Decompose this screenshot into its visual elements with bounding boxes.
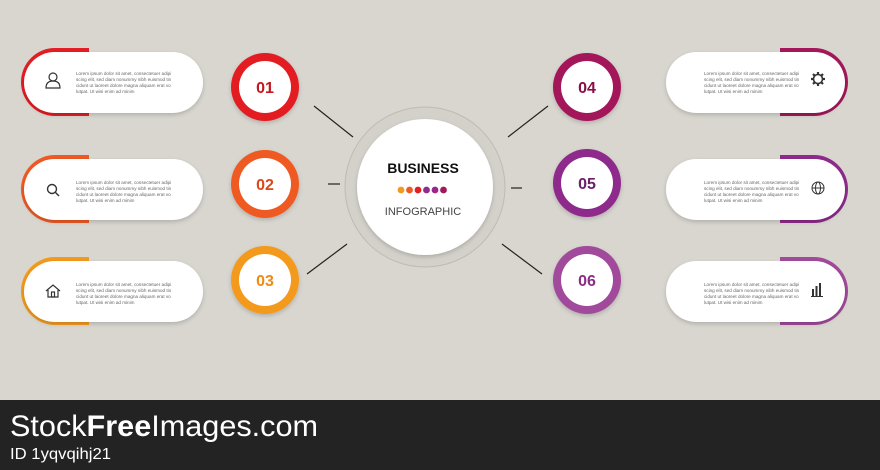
left card 1	[21, 48, 203, 116]
left card 2: lutpat. Ut wisi enim ad minim	[76, 198, 135, 203]
left card 2	[21, 155, 203, 223]
number circle 04	[553, 53, 621, 121]
right card 5	[666, 155, 848, 223]
right card 5: lutpat. Ut wisi enim ad minim	[704, 198, 763, 203]
left card 2: Lorem ipsum dolor sit amet, consectetuer adipi	[76, 180, 171, 185]
left card 3: cidunt ut laoreet dolore magna aliquam erat vo	[76, 294, 171, 299]
icon: globe	[812, 182, 824, 194]
right card 6: Lorem ipsum dolor sit amet, consectetuer adipi	[704, 282, 799, 287]
right card 6: lutpat. Ut wisi enim ad minim	[704, 300, 763, 305]
icon: bar chart	[811, 283, 823, 297]
icon: search	[48, 184, 59, 196]
number circle 03	[231, 246, 299, 314]
number circle 02	[231, 150, 299, 218]
right card 4: Lorem ipsum dolor sit amet, consectetuer adipi	[704, 71, 799, 76]
footer band: ID 1yqvqihj21	[10, 446, 111, 463]
center circle	[345, 107, 505, 267]
subtitle: INFOGRAPHIC	[385, 206, 461, 218]
number circle 06: 06	[578, 273, 596, 290]
icon: gear	[811, 72, 825, 86]
right card 4: cidunt ut laoreet dolore magna aliquam erat vo	[704, 83, 799, 88]
number circle 02: 02	[256, 177, 274, 194]
left card 2: cidunt ut laoreet dolore magna aliquam erat vo	[76, 192, 171, 197]
right card 6: scing elit, sed diam nonummy nibh euismod tin	[704, 288, 800, 293]
connector lines	[307, 106, 548, 274]
number circle 05: 05	[578, 176, 596, 193]
footer band	[0, 400, 880, 470]
right card 4: scing elit, sed diam nonummy nibh euismod tin	[704, 77, 800, 82]
right card 5: cidunt ut laoreet dolore magna aliquam erat vo	[704, 192, 799, 197]
right card 5: Lorem ipsum dolor sit amet, consectetuer adipi	[704, 180, 799, 185]
color dots	[398, 187, 447, 193]
left card 1: Lorem ipsum dolor sit amet, consectetuer adipi	[76, 71, 171, 76]
right card 6	[666, 257, 848, 325]
number circle 03: 03	[256, 273, 274, 290]
number circle 05	[553, 149, 621, 217]
icon: user	[46, 73, 60, 88]
title: BUSINESS	[387, 160, 459, 176]
left card 3	[21, 257, 203, 325]
left card 3: lutpat. Ut wisi enim ad minim	[76, 300, 135, 305]
icon: home	[46, 285, 60, 297]
right card 6: cidunt ut laoreet dolore magna aliquam erat vo	[704, 294, 799, 299]
left card 1: cidunt ut laoreet dolore magna aliquam erat vo	[76, 83, 171, 88]
left card 1: scing elit, sed diam nonummy nibh euismod tin	[76, 77, 172, 82]
left card 3: Lorem ipsum dolor sit amet, consectetuer adipi	[76, 282, 171, 287]
right card 5: scing elit, sed diam nonummy nibh euismod tin	[704, 186, 800, 191]
left card 1: lutpat. Ut wisi enim ad minim	[76, 89, 135, 94]
left card 3: scing elit, sed diam nonummy nibh euismod tin	[76, 288, 172, 293]
right card 4	[666, 48, 848, 116]
number circle 01: 01	[256, 80, 274, 97]
right card 4: lutpat. Ut wisi enim ad minim	[704, 89, 763, 94]
number circle 04: 04	[578, 80, 596, 97]
number circle 06	[553, 246, 621, 314]
footer band: StockFreeImages.com	[10, 410, 318, 443]
number circle 01	[231, 53, 299, 121]
left card 2: scing elit, sed diam nonummy nibh euismod tin	[76, 186, 172, 191]
